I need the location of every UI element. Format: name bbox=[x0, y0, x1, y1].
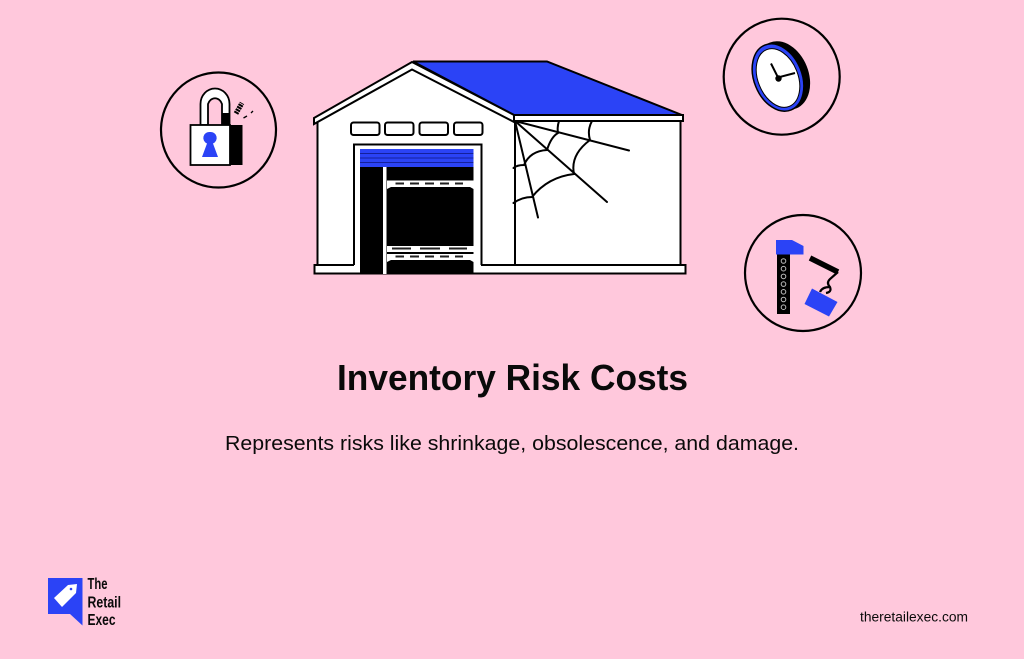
load bbox=[804, 288, 838, 316]
shutter bbox=[360, 149, 474, 167]
crane cab bbox=[776, 240, 804, 254]
base bbox=[314, 265, 686, 274]
warehouse illustration bbox=[314, 62, 686, 274]
icon: clock bbox=[724, 19, 840, 135]
description: Represents risks like shrinkage, obsolescence, and damage. bbox=[225, 432, 799, 455]
icon: padlock bbox=[161, 72, 276, 188]
gable trim bbox=[314, 62, 514, 124]
hook bbox=[820, 272, 838, 293]
eave trim bbox=[514, 115, 683, 121]
icon: crane bbox=[745, 215, 861, 331]
spider web bbox=[514, 121, 629, 218]
roof bbox=[413, 62, 682, 115]
mast bbox=[777, 254, 790, 314]
logo: Exec bbox=[88, 612, 116, 629]
boom bbox=[810, 258, 838, 272]
upper shelf bbox=[387, 180, 474, 189]
website url: theretailexec.com bbox=[860, 610, 968, 624]
door opening bbox=[360, 149, 474, 274]
shackle bbox=[200, 88, 230, 125]
lock body bbox=[190, 125, 230, 165]
walls bbox=[318, 121, 680, 265]
logo: Retail bbox=[88, 594, 121, 612]
title: Inventory Risk Costs bbox=[337, 357, 688, 398]
logo bbox=[48, 576, 121, 629]
logo wordmark: The bbox=[88, 576, 108, 593]
lower shelf boxes bbox=[387, 246, 474, 252]
sparks bbox=[236, 103, 242, 114]
clock hands bbox=[771, 64, 795, 78]
logo mark bbox=[48, 578, 82, 626]
vents bbox=[351, 122, 482, 135]
keyhole bbox=[202, 132, 218, 157]
door frame bbox=[354, 144, 482, 265]
